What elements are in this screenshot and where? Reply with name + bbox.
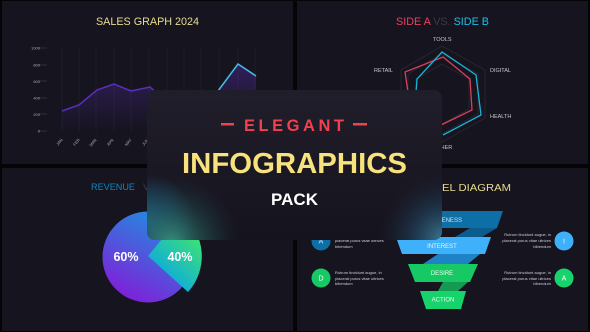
radar labels: DIGITAL [490, 68, 511, 74]
radar labels: OTHER [433, 145, 452, 151]
heading: sales graph 2024: SALES GRAPH 2024 [96, 16, 199, 28]
item: A left [312, 232, 384, 250]
blue line [218, 64, 256, 91]
radar series: side a [405, 57, 472, 125]
item: D [312, 268, 384, 288]
funnel [383, 211, 503, 309]
pie label 60%: 60% [113, 250, 139, 264]
y axis labels: 200 [33, 112, 41, 117]
line chart [31, 46, 256, 147]
funnel layer: desire: DESIRE [431, 271, 453, 277]
funnel layer: action: ACTION [432, 298, 454, 304]
item: A right: A [562, 276, 567, 282]
funnel layer: interest: INTEREST [427, 244, 457, 250]
item: I: bibendum [533, 244, 552, 249]
area fill [62, 64, 256, 131]
item: I: Rutrum tincidunt augue, in [504, 232, 551, 237]
panel: sales graph [2, 1, 293, 164]
item: D: Rutrum tincidunt augue, in [335, 270, 382, 275]
x axis labels: FEB [72, 137, 81, 147]
item: A right: Rutrum tincidunt augue, in [504, 270, 551, 275]
y axis labels: 400 [33, 96, 41, 100]
item: I [502, 232, 574, 250]
item: D: D [318, 276, 324, 282]
item: A left: bibendum [335, 244, 353, 249]
x axis labels: MAY [124, 137, 133, 147]
heading: revenue vs: VS. [143, 182, 158, 193]
item: I: I [563, 238, 565, 246]
title: pack: PACK [271, 190, 319, 209]
radar labels: HEALTH [490, 114, 511, 120]
title: elegant: ELEGANT [244, 117, 344, 135]
pie slice: 40% [148, 215, 202, 292]
item: A left: placerat purus vitae ultrices [335, 238, 384, 243]
center title card [147, 90, 442, 240]
heading: funnel diagram: EL DIAGRAM [442, 182, 511, 194]
item: A right: placerat purus vitae ultrices [502, 276, 551, 281]
x axis labels [55, 137, 150, 147]
x axis labels: APR [106, 137, 115, 147]
y axis labels: 800 [33, 62, 41, 68]
radar chart [374, 37, 511, 151]
x axis labels: MAR [88, 137, 98, 147]
item: A left: A [319, 238, 324, 246]
radar series: side b [416, 52, 481, 135]
x axis labels: JUN [141, 137, 150, 147]
radar labels [374, 37, 511, 151]
funnel layer: awareness: AWARENESS [424, 218, 462, 224]
purple line [62, 84, 157, 111]
panel: funnel diagram [297, 168, 588, 331]
y axis labels: 600 [33, 79, 41, 84]
heading: revenue vs: REVENUE [91, 182, 135, 193]
pie label 40%: 40% [167, 250, 193, 264]
item: I: placerat purus vitae ultrices [502, 238, 551, 243]
item: A right: bibendum [533, 281, 552, 286]
title: infographics: INFOGRAPHICS [182, 148, 407, 180]
panel: revenue pie [2, 168, 293, 331]
y axis labels: 1000 [31, 46, 41, 50]
item: D: placerat purus vitae ultrices [335, 276, 384, 281]
radar grid [401, 46, 485, 142]
y axis labels [31, 46, 41, 134]
radar labels: RETAIL [374, 68, 393, 74]
heading: side a vs side b: SIDE A VS. SIDE B [396, 16, 489, 28]
fold shapes [455, 228, 497, 237]
item: D: bibendum [335, 281, 353, 286]
radar labels: TOOLS [433, 37, 452, 43]
pie chart [102, 212, 202, 302]
pie slice: 60% [102, 212, 194, 302]
panel: side a vs side b [297, 1, 588, 164]
y axis labels: 0 [38, 128, 41, 134]
x axis labels: JAN [55, 137, 64, 146]
item: A right [502, 268, 574, 288]
